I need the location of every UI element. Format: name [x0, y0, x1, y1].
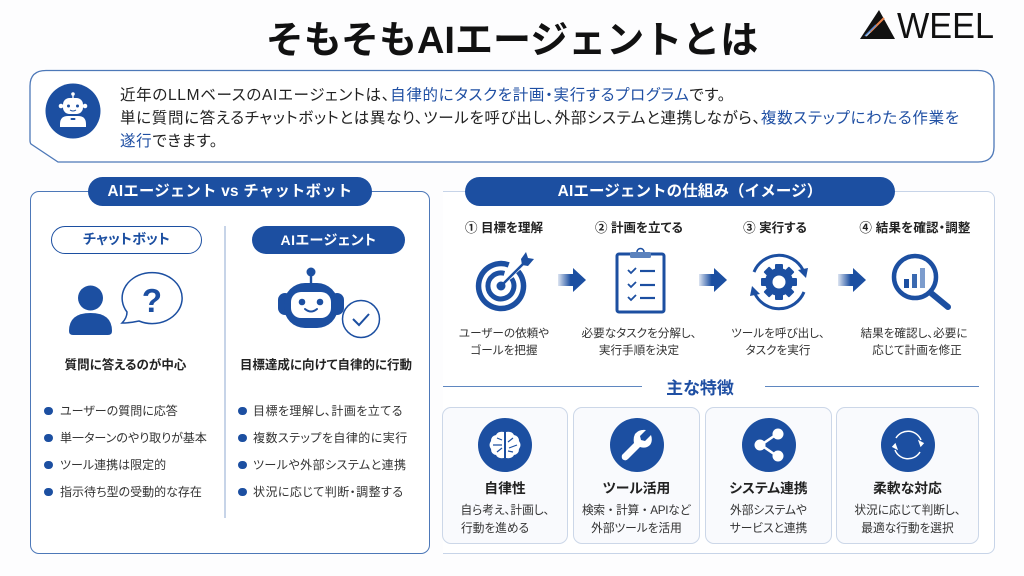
logo: WEEL — [897, 5, 994, 45]
card: flexibility — [836, 407, 979, 544]
logo — [860, 5, 994, 45]
step text 2 — [581, 326, 697, 356]
step text 3: タスクを実行 — [746, 344, 810, 356]
icon: share nodes — [742, 418, 796, 472]
panel: intro — [29, 70, 995, 163]
chatbot summary: 質問に答えるのが中心 — [65, 358, 186, 372]
card text: 検索・計算・APIなど — [582, 504, 691, 517]
agent summary: 目標達成に向けて自律的に行動 — [240, 358, 412, 372]
icon: wrench — [610, 418, 664, 472]
intro text — [120, 86, 960, 150]
list: agent: 複数ステップを自律的に実行 — [253, 431, 408, 445]
panel: how agents work — [443, 191, 995, 554]
heading: vs: AIエージェント vs チャットボット — [108, 183, 352, 200]
list: agent: 目標を理解し、計画を立てる — [253, 404, 403, 418]
card text: サービスと連携 — [730, 522, 807, 535]
heading: vs — [88, 177, 372, 206]
arrow 1 — [558, 268, 586, 292]
step text 1 — [459, 326, 549, 356]
icon: brain — [478, 418, 532, 472]
card text — [854, 504, 961, 535]
icon: gear cycle — [750, 254, 808, 310]
arrow 3 — [838, 268, 866, 292]
icon: person with question bubble — [69, 272, 183, 335]
heading: how it works — [465, 177, 895, 206]
step text 4: 結果を確認し、必要に — [860, 326, 968, 340]
step text 1: ユーザーの依頼や — [459, 326, 549, 340]
step heading 4: ④ 結果を確認・調整 — [859, 221, 971, 235]
step text 1: ゴールを把握 — [470, 344, 538, 356]
step heading 1: ① 目標を理解 — [465, 221, 543, 235]
card: system integration — [705, 407, 832, 544]
step text 3: ツールを呼び出し、 — [731, 326, 825, 340]
card: autonomy — [442, 407, 568, 544]
divider — [224, 226, 226, 518]
card text: 外部システムや — [730, 504, 807, 517]
AI agent pill: AIエージェント — [280, 232, 377, 248]
list: chatbot — [44, 404, 207, 499]
heading: how it works: AIエージェントの仕組み（イメージ） — [558, 183, 822, 200]
icon: target — [476, 252, 534, 312]
list: chatbot: ユーザーの質問に応答 — [60, 404, 178, 418]
intro box outline — [29, 70, 995, 163]
list: agent — [238, 404, 408, 499]
list: agent: ツールや外部システムと連携 — [253, 458, 406, 472]
AI agent pill — [252, 226, 405, 254]
chatbot pill: チャットボット — [83, 231, 170, 247]
step text 4: 応じて計画を修正 — [872, 344, 962, 356]
arrow 2 — [699, 268, 727, 292]
title: そもそもAIエージェントとは — [266, 20, 758, 62]
icon: magnifier chart — [892, 254, 951, 310]
card text: 行動を進める — [461, 522, 529, 535]
icon: robot with check — [278, 268, 380, 338]
intro text: 近年のLLMベースのAIエージェントは、自律的にタスクを計画・実行するプログラムです。 — [120, 87, 726, 104]
card title: ツール活用 — [603, 481, 670, 496]
list: chatbot: 指示待ち型の受動的な存在 — [60, 485, 202, 499]
list: agent: 状況に応じて判断・調整する — [253, 485, 404, 499]
heading: key features: 主な特徴 — [666, 379, 734, 398]
card title: 自律性 — [484, 481, 526, 496]
icon: robot badge — [46, 84, 100, 138]
icon: cycle arrows — [881, 418, 935, 472]
panel: AI agent vs chatbot — [30, 191, 430, 554]
card text — [460, 504, 550, 535]
step text 3 — [731, 326, 825, 356]
step text 2: 必要なタスクを分解し、 — [581, 326, 697, 340]
list: chatbot: 単一ターンのやり取りが基本 — [60, 431, 207, 445]
card text: 最適な行動を選択 — [861, 522, 954, 535]
card title: 柔軟な対応 — [873, 481, 942, 496]
step heading 2: ② 計画を立てる — [595, 221, 683, 235]
step heading 3: ③ 実行する — [743, 221, 807, 235]
intro text: 遂行できます。 — [120, 133, 218, 150]
card: tools — [573, 407, 700, 544]
card text — [730, 504, 807, 535]
card title: システム連携 — [729, 481, 808, 496]
card text: 外部ツールを活用 — [591, 522, 682, 535]
intro text: 単に質問に答えるチャットボットとは異なり、ツールを呼び出し、外部システムと連携しながら、複数ステップにわたる作業を — [120, 110, 960, 127]
step text 2: 実行手順を決定 — [599, 344, 679, 356]
step text 4 — [860, 326, 968, 356]
list: chatbot: ツール連携は限定的 — [60, 458, 166, 472]
card text: 状況に応じて判断し、 — [854, 504, 961, 517]
card text: 自ら考え、計画し、 — [460, 504, 550, 517]
card text — [582, 504, 691, 535]
icon: person with question bubble: ? — [142, 282, 162, 319]
icon: clipboard checklist — [616, 248, 666, 314]
chatbot pill — [51, 226, 202, 254]
